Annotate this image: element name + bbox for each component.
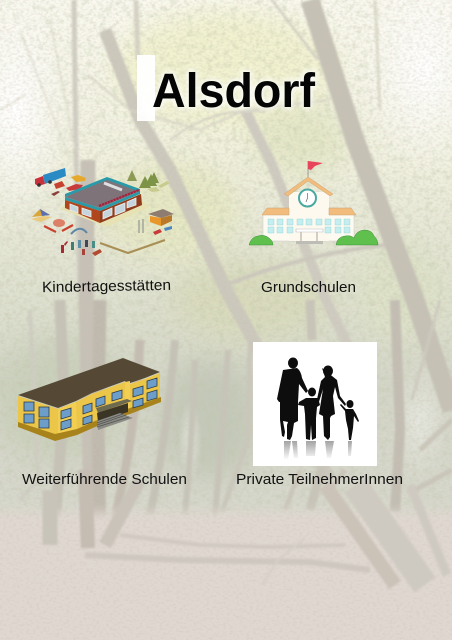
building: [60, 177, 149, 227]
icon: primary school with flag: [249, 161, 378, 245]
label: Kindertagesstätten: Kindertagesstätten: [42, 277, 171, 296]
label: Grundschulen: Grundschulen: [261, 279, 356, 296]
fence: [100, 240, 165, 253]
trees and beds: [127, 170, 170, 192]
title: Alsdorf: Alsdorf: [152, 65, 316, 118]
children: [61, 240, 102, 256]
mother: [316, 366, 346, 440]
icon: family: [277, 358, 359, 440]
walls: [18, 373, 161, 441]
label: Private TeilnehmerInnen: Private TeilnehmerInnen: [236, 471, 403, 488]
playground umbrella: [31, 209, 87, 234]
title: Alsdorf: Alsdorf: [152, 65, 316, 118]
entrance and steps: [96, 399, 133, 430]
son: [298, 388, 320, 440]
flag: [308, 161, 323, 177]
father: [277, 358, 308, 440]
reflection: [284, 441, 352, 460]
garage: [148, 209, 174, 226]
label: Weiterführende Schulen: Weiterführende Schulen: [22, 471, 187, 488]
panel: family silhouette on white: [253, 342, 377, 466]
upper slim trunks: [74, 0, 80, 290]
school body: [262, 177, 356, 244]
bushes: [249, 230, 378, 245]
forest floor: [0, 512, 452, 640]
lower forest trunks: [54, 300, 64, 540]
parked cars: [51, 175, 86, 196]
roof: [18, 358, 160, 408]
truck: [35, 168, 66, 187]
daughter: [340, 400, 359, 440]
icon: secondary school building: [18, 358, 161, 441]
small cars and lamp: [139, 219, 172, 235]
icon: isometric kindergarten: [31, 168, 174, 256]
